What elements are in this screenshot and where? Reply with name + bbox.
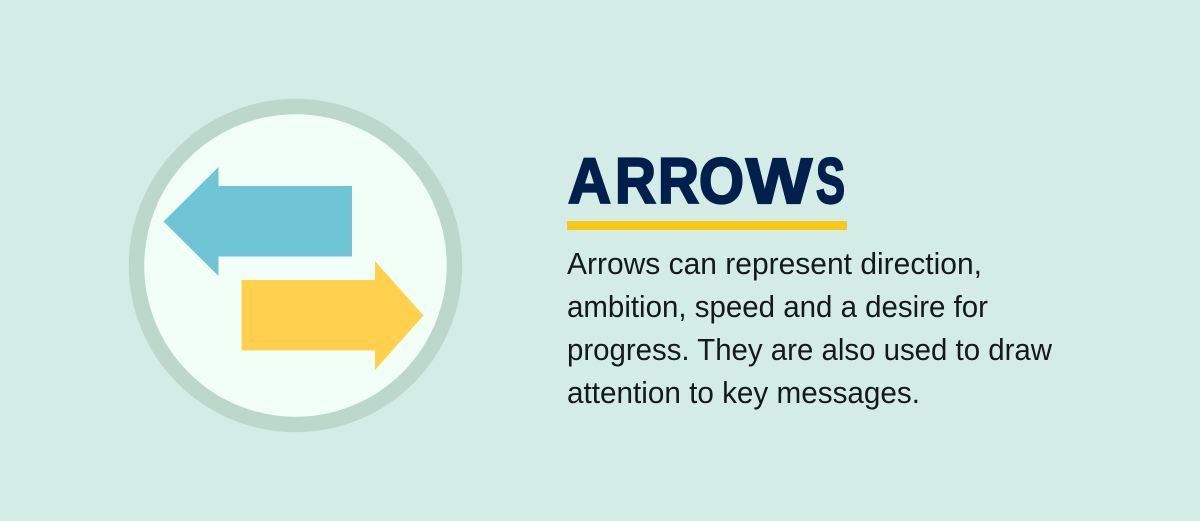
body text: ambition, speed and a desire for <box>567 289 988 324</box>
arrow: blue pointing left <box>164 167 352 276</box>
title: S <box>816 145 845 217</box>
icon: circle with two arrows <box>136 106 454 424</box>
body text: Arrows can represent direction, <box>567 246 982 281</box>
body text: attention to key messages. <box>567 375 920 410</box>
body text: progress. They are also used to draw <box>567 332 1053 367</box>
title: O <box>699 145 744 217</box>
title: W <box>746 145 813 217</box>
title: A <box>568 145 611 217</box>
title underline <box>567 221 847 230</box>
title <box>568 145 845 217</box>
title: R <box>615 145 656 217</box>
arrow: yellow pointing right <box>242 261 424 370</box>
circle badge <box>136 106 454 424</box>
body text <box>567 246 1053 410</box>
title: R <box>658 145 699 217</box>
